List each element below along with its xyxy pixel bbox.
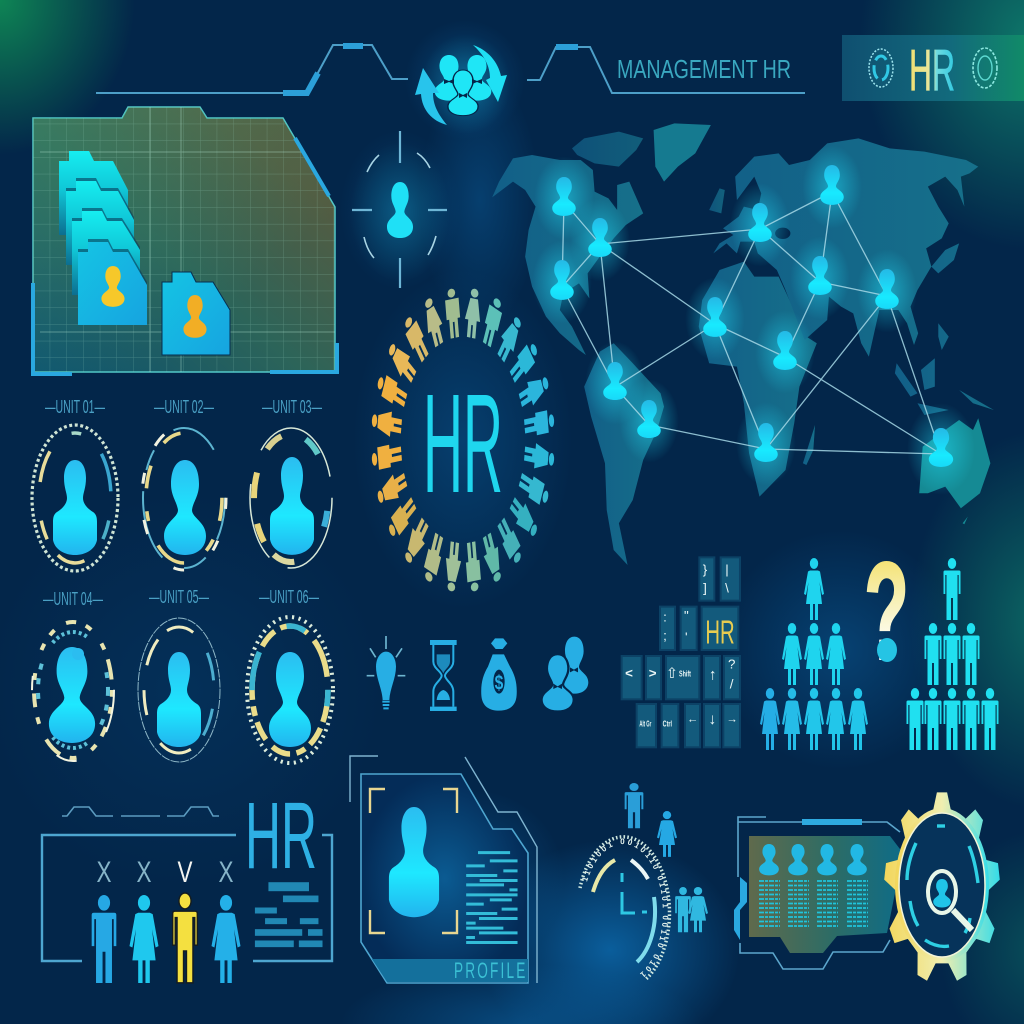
continents: [492, 123, 994, 565]
unit 02: [142, 397, 226, 570]
icon: money bag: $: [495, 672, 503, 694]
men pyramid: [906, 558, 998, 750]
text bars: [255, 882, 323, 947]
key labels: ": [684, 608, 689, 623]
icon: hourglass: [430, 640, 457, 711]
label: —UNIT 05—: [149, 587, 209, 607]
panel: top right HR badge: [842, 35, 1024, 103]
key labels: Alt Gr: [639, 719, 652, 729]
key labels: \: [725, 581, 729, 596]
keyboard: [622, 557, 740, 747]
folder stack: [59, 151, 147, 325]
key labels: ': [685, 630, 688, 645]
network people: [550, 165, 953, 467]
key labels: :: [663, 610, 667, 625]
key labels: ↓: [708, 711, 716, 728]
label: PROFILE: [454, 958, 528, 983]
person: [53, 460, 97, 555]
person: [157, 652, 201, 747]
unit 03: [250, 397, 332, 568]
key labels: ?: [728, 656, 735, 671]
icon: money bag: [481, 638, 517, 711]
ring: [32, 619, 114, 761]
icon: team with arrows: [415, 34, 511, 134]
world map: [492, 123, 994, 565]
key labels: }: [703, 562, 708, 577]
marks: [96, 856, 234, 889]
icon: orange person in folder: [183, 295, 207, 338]
icon: yellow person in folder: [101, 266, 125, 307]
clock hands: [622, 873, 647, 913]
icon: two business people: [542, 637, 588, 711]
ring of people with HR: [371, 287, 555, 593]
key labels: /: [730, 676, 734, 691]
unit 05: [138, 587, 220, 762]
ring of people with HR: HR: [423, 364, 503, 522]
icon: left ring: [869, 49, 893, 87]
label: —UNIT 02—: [154, 397, 214, 417]
people row: [92, 893, 240, 983]
key labels: ←: [687, 714, 698, 726]
icon: light bulb: [367, 636, 405, 708]
key labels: ;: [663, 628, 667, 643]
panel: folders: [33, 107, 337, 374]
binary text: 1101001 0010110 01101 00110 0101: [582, 838, 668, 977]
ring: [250, 428, 332, 568]
panel: info card: [734, 817, 903, 969]
person: [269, 652, 311, 747]
decorative squiggle: [62, 807, 219, 816]
magnifier: [928, 871, 972, 930]
frame lines: [738, 817, 900, 969]
second folder: [162, 272, 230, 355]
marks: X: [136, 856, 152, 889]
women pyramid: [760, 558, 868, 750]
panel: profile: [350, 756, 537, 983]
label: —UNIT 06—: [259, 587, 319, 607]
card body: [749, 836, 903, 953]
person: [270, 457, 314, 555]
key labels: Shift: [679, 670, 691, 679]
key labels: |: [725, 562, 729, 577]
marks: X: [218, 856, 234, 889]
person: [164, 460, 206, 555]
marks: X: [96, 856, 112, 889]
ring: [138, 618, 220, 762]
text columns: [759, 881, 868, 926]
key labels: →: [726, 714, 738, 726]
person: [389, 807, 439, 917]
icon: right gear ring: [973, 48, 997, 88]
node glows: [532, 145, 975, 495]
icon: question mark: [864, 534, 909, 689]
key labels: HR: [705, 614, 735, 651]
frame: [42, 835, 332, 961]
unit 06: [247, 587, 333, 763]
network lines: [562, 192, 941, 454]
icon: gear with magnifier: [884, 792, 1000, 981]
key labels: ⇧: [666, 666, 678, 682]
ring: [32, 425, 118, 571]
inner arcs: [907, 826, 978, 946]
label: —UNIT 03—: [262, 397, 322, 417]
key labels: <: [625, 665, 633, 680]
people: [759, 844, 867, 875]
unit 04: [32, 589, 114, 761]
people ring: [371, 287, 555, 593]
ring: [247, 617, 333, 763]
key labels: ]: [703, 581, 707, 596]
label: —UNIT 04—: [43, 589, 103, 609]
clock with binary ring: [578, 783, 708, 980]
arcs: [580, 837, 669, 980]
person with hair bun: [49, 647, 95, 743]
keys: [622, 557, 740, 747]
heading: HR: HR: [245, 783, 317, 889]
heading: HR: HR: [909, 38, 955, 103]
key labels: Ctrl: [663, 719, 672, 729]
header line left: [96, 43, 408, 93]
marks: V: [178, 856, 192, 889]
key labels: [625, 562, 738, 729]
gear: [884, 792, 1000, 981]
ring: [142, 426, 226, 570]
heading: management HR: MANAGEMENT HR: [617, 54, 791, 84]
label: —UNIT 01—: [45, 397, 105, 417]
key labels: ↑: [709, 666, 716, 683]
panel: HR selection: [42, 783, 332, 983]
profile band: [372, 959, 528, 982]
brackets: [370, 789, 457, 933]
text lines: [466, 853, 518, 942]
person icons: [625, 783, 708, 932]
icon: question mark: ?: [864, 534, 909, 689]
header line right: [527, 44, 805, 93]
icon: target person: [350, 131, 450, 288]
unit 01: [32, 397, 118, 571]
key labels: >: [649, 665, 657, 680]
